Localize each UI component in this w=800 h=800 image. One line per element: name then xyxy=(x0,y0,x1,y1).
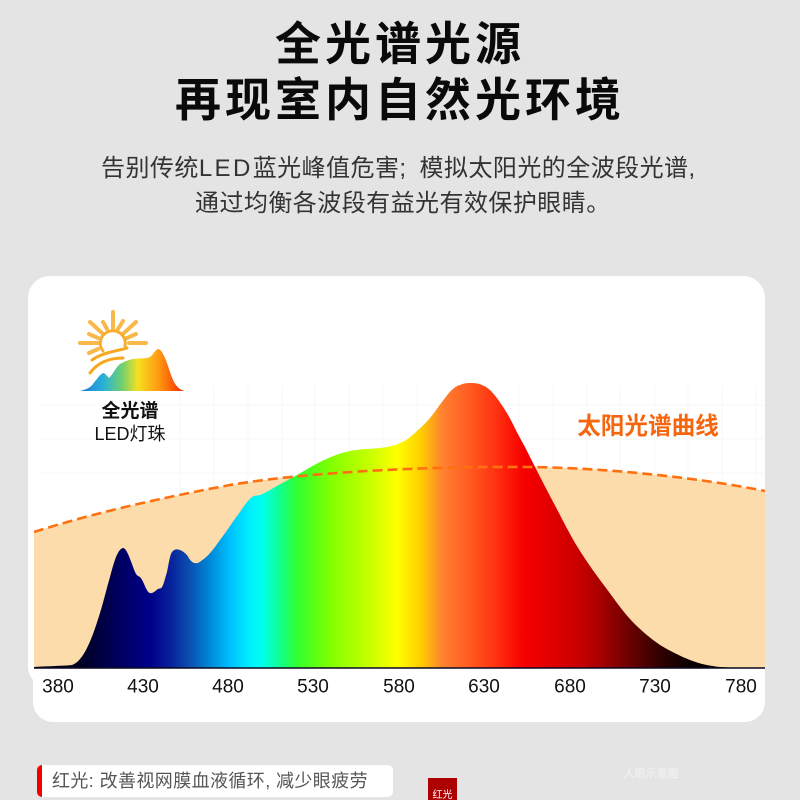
label: full spectrum LED xyxy=(94,400,166,444)
baseline xyxy=(34,667,765,669)
x axis labels: 730 xyxy=(639,676,671,698)
subtitle text: 告别传统LED蓝光峰值危害; 模拟太阳光的全波段光谱, xyxy=(101,155,696,182)
x axis labels: 630 xyxy=(468,676,500,698)
faint caption: 人眼示意图 xyxy=(624,768,678,780)
x axis labels xyxy=(42,676,757,698)
label: full spectrum LED: 全光谱 xyxy=(101,401,158,422)
tag: red light xyxy=(428,778,457,800)
x axis labels: 580 xyxy=(383,676,415,698)
callout: red light benefit xyxy=(37,765,393,797)
faint grid xyxy=(40,385,765,500)
x axis labels: 780 xyxy=(725,676,757,698)
label: full spectrum LED: LED灯珠 xyxy=(94,424,166,444)
callout: red light benefit: 红光: 改善视网膜血液循环, 减少眼疲劳 xyxy=(52,771,368,791)
title: 再现室内自然光环境 xyxy=(175,74,625,126)
x axis labels: 380 xyxy=(42,676,74,698)
x axis labels: 530 xyxy=(297,676,329,698)
card background xyxy=(28,276,765,722)
x axis labels: 680 xyxy=(554,676,586,698)
area: full-spectrum LED curve xyxy=(34,383,765,668)
icon: sun and mini spectrum xyxy=(80,312,185,391)
x axis labels: 480 xyxy=(212,676,244,698)
area: solar curve fill xyxy=(34,467,765,668)
subtitle text: 通过均衡各波段有益光有效保护眼睛。 xyxy=(195,190,611,216)
label: solar curve: 太阳光谱曲线 xyxy=(577,413,719,440)
dashed solar spectrum curve xyxy=(34,467,765,532)
subtitle text xyxy=(101,155,696,216)
title: 全光谱光源 xyxy=(275,18,525,70)
title xyxy=(175,18,625,126)
x axis labels: 430 xyxy=(127,676,159,698)
panel: spectrum chart card xyxy=(28,276,766,722)
